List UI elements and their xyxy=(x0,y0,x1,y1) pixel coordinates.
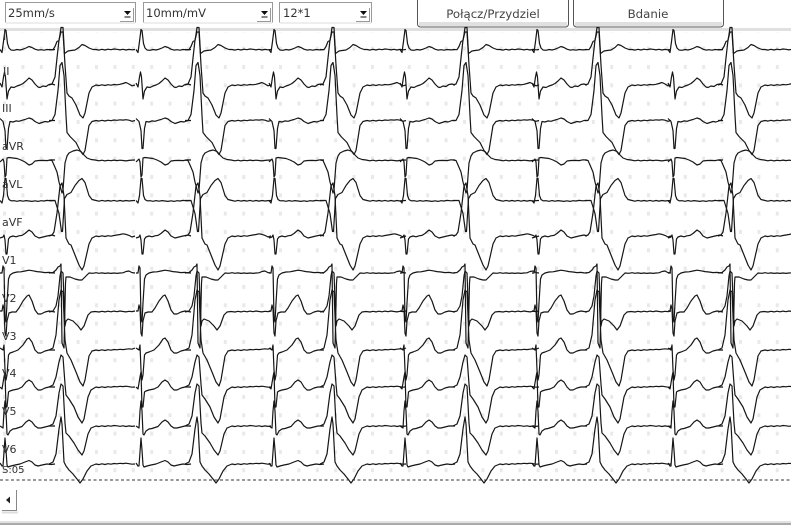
trace: lead aVR xyxy=(0,150,791,193)
lead labels: V2 xyxy=(2,292,17,305)
toolbar separator xyxy=(0,28,791,31)
lead labels: V5 xyxy=(2,405,17,418)
trace: lead V3 xyxy=(0,290,791,386)
trace: lead V6 xyxy=(0,417,791,483)
lead labels: III xyxy=(2,102,12,115)
trace: lead III xyxy=(0,62,791,154)
scroll left button xyxy=(2,490,18,512)
time axis dashed line xyxy=(0,479,791,481)
button: examination: Bdanie xyxy=(628,7,668,21)
lead labels: V6 xyxy=(2,443,17,456)
trace: lead II xyxy=(0,32,791,118)
button: connect / assign: Połącz/Przydziel xyxy=(446,7,540,21)
lead labels: V3 xyxy=(2,330,17,343)
bottom status bar edge xyxy=(0,521,791,525)
lead labels: S:05 xyxy=(2,465,24,476)
trace: lead I xyxy=(0,28,791,54)
lead labels: V4 xyxy=(2,367,17,380)
lead labels: II xyxy=(3,65,10,78)
lead labels: aVF xyxy=(2,216,23,229)
lead labels: V1 xyxy=(2,254,17,267)
button: examination xyxy=(574,0,724,27)
trace: lead V2 xyxy=(0,271,791,336)
dropdown: amplitude gain: 10mm/mV xyxy=(146,6,206,20)
trace: lead aVF xyxy=(0,183,791,270)
dropdown: paper speed xyxy=(6,2,136,23)
button: connect / assign xyxy=(418,0,568,27)
trace: lead V1 xyxy=(0,264,791,348)
trace: lead aVL xyxy=(0,178,791,232)
dropdown: paper speed: 25mm/s xyxy=(8,6,55,20)
dropdown: lead layout xyxy=(280,2,372,23)
dropdown: lead layout: 12*1 xyxy=(283,6,311,20)
lead labels: I xyxy=(3,30,6,43)
trace: lead V5 xyxy=(0,384,791,455)
dropdown: amplitude gain xyxy=(144,2,272,23)
lead labels xyxy=(2,30,24,476)
trace: lead V4 xyxy=(0,355,791,423)
lead labels: aVR xyxy=(2,140,24,153)
lead labels: aVL xyxy=(2,178,23,191)
